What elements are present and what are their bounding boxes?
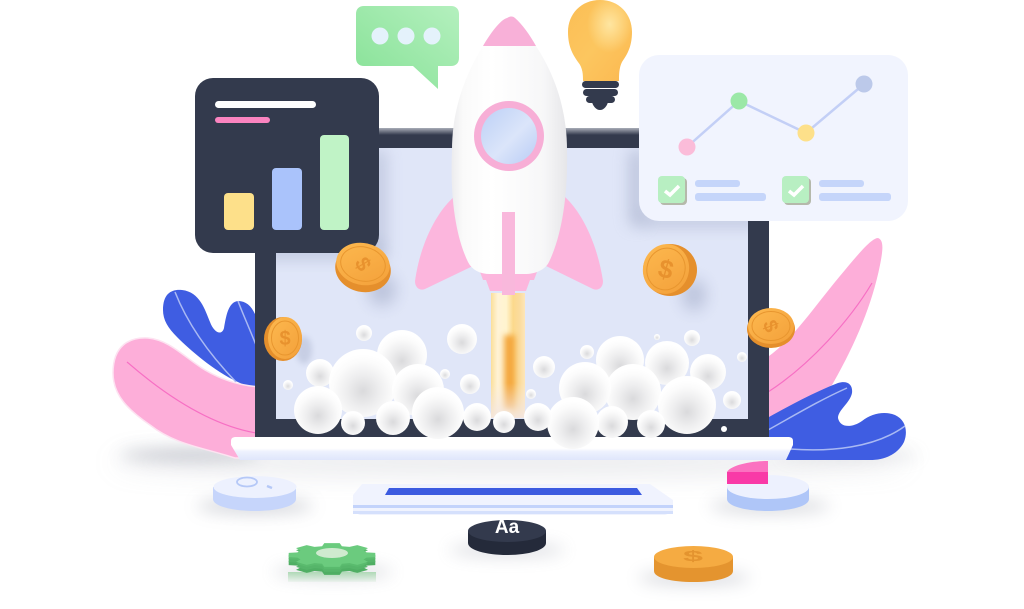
icon: chat bubble — [356, 6, 459, 89]
coin: far right: $ — [758, 317, 782, 335]
icon: magnifier — [237, 478, 272, 488]
coin: far left: $ — [279, 328, 291, 350]
chart line — [687, 84, 864, 147]
keyboard tablet — [353, 484, 673, 515]
rocket fins — [415, 196, 475, 290]
coin: far right — [747, 308, 795, 348]
laptop — [231, 128, 793, 460]
subtitle line — [215, 117, 270, 123]
Aa disc — [468, 517, 546, 555]
search disc — [213, 476, 296, 511]
laptop base — [231, 437, 793, 460]
panel shadows on screen — [260, 150, 760, 364]
panel: bar chart — [195, 78, 379, 253]
check item 1 — [658, 176, 766, 205]
rocket nozzle — [480, 272, 537, 291]
coin disc — [654, 546, 733, 582]
leaf: blue right — [762, 382, 906, 460]
blue bar — [385, 488, 642, 495]
Aa disc: Aa — [495, 517, 520, 538]
gear — [288, 543, 376, 582]
coin disc: $ — [683, 548, 703, 564]
laptop screen — [276, 148, 748, 419]
bar: green — [320, 135, 349, 230]
panel: line chart — [639, 55, 908, 221]
pie disc — [727, 461, 809, 511]
bar: blue — [272, 168, 302, 230]
data points — [678, 76, 872, 156]
rocket window — [474, 101, 544, 171]
check item 2 — [782, 176, 891, 205]
coin: upper right — [637, 239, 697, 299]
flame — [491, 293, 525, 418]
coin: upper left: $ — [350, 253, 376, 275]
leaf: blue left — [163, 290, 262, 395]
rocket centre strip — [502, 212, 515, 295]
leaf: pink left — [113, 338, 262, 458]
pie slice — [727, 461, 768, 484]
title line — [215, 101, 316, 108]
leaf: pink right — [760, 238, 882, 425]
bar: yellow — [224, 193, 254, 230]
clouds: left bubbles — [283, 324, 515, 439]
rocket — [415, 16, 603, 295]
coin: upper left — [331, 238, 395, 297]
coin: upper right: $ — [655, 253, 677, 285]
clouds: right bubbles — [524, 330, 747, 449]
rocket body — [452, 46, 567, 274]
floor shadows — [110, 449, 920, 585]
coin: far left — [264, 317, 302, 361]
laptop frame — [255, 128, 769, 440]
icon: light bulb — [568, 0, 632, 110]
rocket nose — [483, 16, 536, 46]
